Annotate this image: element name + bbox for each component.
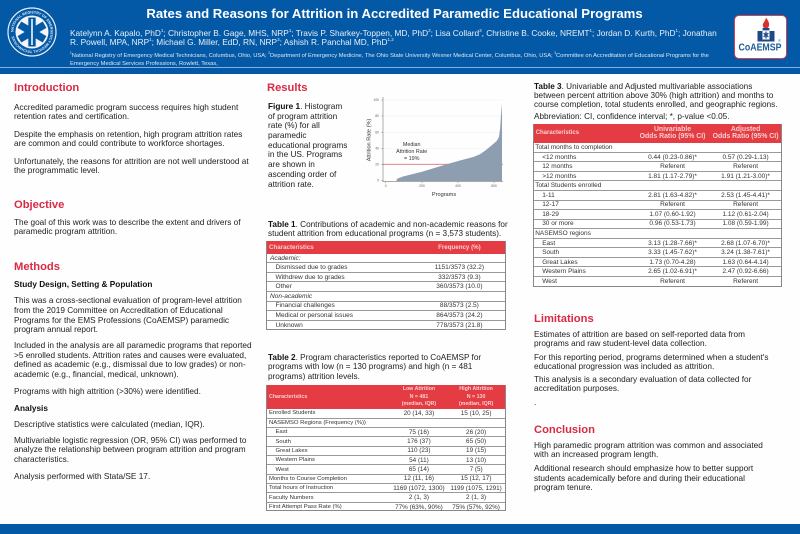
table 2: Great Lakes — [276, 448, 308, 454]
table 2: 7 (5) — [470, 466, 483, 473]
text: limitations paragraph 2: educational progression was included as attrition. — [534, 362, 714, 371]
text: methods paragraph 3: Programs with high attrition (>30%) were identified. — [14, 387, 201, 396]
text: figure 1 caption: paramedic — [268, 131, 307, 140]
affiliations: 1National Registry of Emergency Medical Technicians, Columbus, Ohio, USA; 2Department of Emergency Medicine, The Ohio State University Wexner Medical Center, Columbus, Ohio, USA; 3Committee on Accreditation of Educational Programs for the — [70, 51, 709, 59]
text: analysis paragraph 1: Descriptive statistics were calculated (median, IQR). — [14, 420, 205, 429]
text: limitations paragraph 1 — [534, 330, 745, 348]
table 3: 2.68 (1.07-6.70)* — [721, 240, 770, 247]
text: methods paragraph 2: >5 enrolled students. Attrition rates and causes were evaluated, — [14, 351, 246, 360]
table 3: Referent — [733, 163, 758, 170]
table 1: 1151/3573 (32.2) — [435, 264, 484, 271]
table 2: (median, IQR) — [459, 401, 493, 407]
table 3: South — [542, 249, 559, 256]
table 1 caption: student attrition from educational programs (n = 3,573 students). — [268, 229, 501, 238]
chart: program attrition rate histogram: 100 — [373, 98, 379, 102]
table 2: 75% (57%, 92%) — [452, 504, 500, 511]
text: objective: paramedic program attrition. — [14, 227, 117, 236]
table 3: 2.81 (1.63-4.82)* — [648, 192, 697, 199]
text: figure 1 caption: Figure 1. Histogram — [268, 102, 342, 111]
text: limitations paragraph 3: accreditation purposes. — [534, 384, 619, 393]
table 2: 1169 (1072, 1300) — [393, 485, 445, 492]
table 3: Characteristics — [536, 130, 579, 136]
chart: program attrition rate histogram: 400 — [455, 184, 461, 188]
chart: program attrition rate histogram: 0 — [377, 178, 379, 182]
text: introduction paragraph 1: retention rates and certification. — [14, 112, 129, 121]
table 2: Total hours of Instruction — [269, 485, 333, 491]
text: limitations paragraph 3: This analysis is a secondary evaluation of data collected for — [534, 375, 751, 384]
text: introduction paragraph 1: Accredited paramedic program success requires high student — [14, 103, 238, 112]
affiliations: Emergency Medical Services Professions, Rowlett, Texas, — [70, 61, 218, 67]
table 2: 65 (50) — [466, 438, 486, 445]
table 3: 1.81 (1.17-2.79)* — [648, 173, 697, 180]
table 1 caption: Table 1. Contributions of academic and non-academic reasons for — [268, 220, 508, 229]
text: methods paragraph 1: from the 2019 Committee on Accreditation of Educational — [14, 306, 223, 315]
authors: R. Powell, MPA, NRP1; Michael G. Miller, EdD, RN, NRP3; Ashish R. Panchal MD, PhD1,2 — [70, 37, 394, 47]
table 3: 12-17 — [542, 201, 559, 208]
icon: CoAEMSP logo — [734, 15, 786, 58]
table 2 caption — [268, 353, 481, 381]
table 3 caption: between percent attrition above 30% (high attrition) and months to — [534, 91, 773, 100]
text: stray period: . — [534, 398, 536, 407]
table 2: 12 (11, 16) — [404, 475, 434, 482]
chart: program attrition rate histogram: 40 — [375, 146, 379, 150]
table 1: 88/3573 (2.5) — [440, 302, 479, 309]
table 2: 20 (14, 33) — [404, 410, 434, 417]
table 3: 2.47 (0.92-6.66) — [722, 268, 769, 275]
heading: Objective: Objective — [14, 199, 64, 211]
subheading: analysis: Analysis — [14, 404, 48, 413]
text: methods paragraph 2: defined as academic (e.g., dismissal due to low grades) or non- — [14, 360, 246, 369]
table 3: East — [542, 240, 555, 247]
table 2: Western Plains — [276, 457, 315, 463]
text: conclusion paragraph 2 — [534, 464, 754, 492]
table 2: Months to Course Completion — [269, 476, 347, 482]
table 3: 1.07 (0.60-1.92) — [649, 211, 696, 218]
chart: program attrition rate histogram: Programs — [432, 192, 456, 198]
table 3: 1-11 — [542, 192, 555, 199]
table 3: 30 or more — [542, 220, 574, 227]
table 1: Non-academic — [270, 293, 312, 300]
chart: program attrition rate histogram — [366, 97, 503, 198]
text: conclusion paragraph 2: Additional research should emphasize how to better support — [534, 464, 753, 473]
table 2: 2 (1, 3) — [466, 494, 486, 501]
table 3: Referent — [660, 163, 685, 170]
table 2 caption: programs with low (n = 130 programs) and high (n = 481 — [268, 362, 472, 371]
text: methods paragraph 1 — [14, 296, 242, 334]
table 2: 110 (23) — [407, 447, 431, 454]
table 3 caption: Table 3. Univariable and Adjusted multivariable associations — [534, 82, 752, 91]
text: limitations paragraph 1: programs and raw student-level data collection. — [534, 339, 707, 348]
table 2: South — [276, 438, 291, 444]
table 3: Univariable — [654, 126, 691, 133]
chart: program attrition rate histogram: 80 — [375, 114, 379, 118]
text: introduction paragraph 2: Despite the emphasis on retention, high program attrition rates — [14, 130, 242, 139]
table 3 caption: Abbreviation: CI, confidence interval; *, p-value <0.05. — [534, 112, 729, 121]
table 2: First Attempt Pass Rate (%) — [269, 504, 342, 510]
table 3: 1.12 (0.61-2.04) — [722, 211, 769, 218]
table 2 — [266, 385, 506, 511]
heading: Introduction: Introduction — [14, 82, 79, 94]
table 3: Total Students enrolled — [535, 182, 601, 189]
text: objective — [14, 218, 241, 236]
chart: program attrition rate histogram: Median — [403, 142, 421, 148]
chart: program attrition rate histogram: 20 — [375, 162, 379, 166]
table 1: 778/3573 (21.8) — [436, 322, 483, 329]
subheading: study design: Study Design, Setting & Population — [14, 280, 152, 289]
table 2: 54 (11) — [409, 457, 429, 464]
table 3: 2.65 (1.02-6.91)* — [648, 268, 697, 275]
text: analysis paragraph 2 — [14, 436, 246, 464]
text: methods paragraph 2: academic (e.g., financial, medical, unknown). — [14, 370, 179, 379]
table 3: 3.24 (1.38-7.61)* — [721, 249, 770, 256]
table 1: Other — [276, 283, 292, 290]
table 1 caption — [268, 220, 508, 238]
text: introduction paragraph 3: the programmatic level. — [14, 166, 100, 175]
text: conclusion paragraph 2: program tenure. — [534, 483, 593, 492]
text: methods paragraph 1: Programs for the EMS Professions (CoAEMSP) paramedic — [14, 316, 229, 325]
table 3: 3.33 (1.45-7.62)* — [648, 249, 697, 256]
table 3: 1.63 (0.64-4.14) — [722, 259, 769, 266]
table 1: Medical or personal issues — [276, 312, 353, 319]
heading: Methods: Methods — [14, 261, 60, 273]
table 3 caption: course completion, total students enrolled, and geographic regions. — [534, 100, 778, 109]
table 1: Withdrew due to grades — [276, 274, 345, 281]
text: analysis paragraph 2: Multivariable logistic regression (OR, 95% CI) was performed to — [14, 436, 246, 445]
text: conclusion paragraph 1: with an increased program length. — [534, 450, 658, 459]
text: methods paragraph 1: program annual report. — [14, 325, 98, 334]
text: analysis paragraph 2: analyze the relationship between program attrition and program — [14, 445, 246, 454]
text: methods paragraph 2: Included in the analysis are all paramedic programs that reported — [14, 341, 252, 350]
table 1: Unknown — [276, 322, 303, 329]
table 1: 332/3573 (9.3) — [438, 274, 481, 281]
text: introduction paragraph 2: are common and could contribute to workforce shortages. — [14, 139, 224, 148]
table 1: Academic: — [270, 255, 301, 262]
table 2: Faculty Numbers — [269, 495, 314, 501]
text: limitations paragraph 3 — [534, 375, 752, 393]
table 1: Dismissed due to grades — [276, 264, 348, 271]
table 1: 360/3573 (10.0) — [436, 283, 483, 290]
text: figure 1 caption: rate (%) for all — [268, 121, 320, 130]
text: methods paragraph 2 — [14, 341, 252, 379]
table 2: 15 (10, 25) — [461, 410, 491, 417]
footer band — [0, 524, 800, 534]
chart: program attrition rate histogram: = 19% — [404, 156, 420, 162]
text: figure 1 caption: attrition rate. — [268, 180, 314, 188]
table 3: 0.44 (0.23-0.86)* — [648, 154, 697, 161]
table 3: Odds Ratio (95% CI) — [640, 133, 705, 140]
table 1: 864/3573 (24.2) — [436, 312, 483, 319]
table 3: Great Lakes — [542, 259, 578, 266]
table 2 caption: programs) attrition levels. — [268, 372, 360, 381]
table 3: Adjusted — [731, 126, 760, 133]
table 2: Enrolled Students — [269, 410, 316, 416]
table 3: >12 months — [542, 173, 576, 180]
table 3: West — [542, 278, 557, 285]
chart: program attrition rate histogram: 60 — [375, 130, 379, 134]
table 2: (median, IQR) — [402, 401, 436, 407]
title: Rates and Reasons for Attrition in Accredited Paramedic Educational Programs — [146, 6, 643, 21]
text: conclusion paragraph 1: High paramedic program attrition was common and associated — [534, 441, 763, 450]
table 3: Western Plains — [542, 268, 586, 275]
table 2: 15 (12, 17) — [461, 475, 491, 482]
affiliations — [70, 51, 709, 67]
heading: Results: Results — [267, 82, 307, 94]
table 3: <12 months — [542, 154, 576, 161]
text: limitations paragraph 1: Estimates of attrition are based on self-reported data from — [534, 330, 745, 339]
text: limitations paragraph 2 — [534, 352, 769, 371]
authors — [70, 28, 717, 47]
table 2: 1199 (1075, 1291) — [450, 485, 502, 492]
table 3: Referent — [660, 201, 685, 208]
table 3: Referent — [733, 201, 758, 208]
table 2: 2 (1, 3) — [409, 494, 429, 501]
text: introduction paragraph 3: Unfortunately, the reasons for attrition are not well understood at — [14, 157, 249, 166]
header band — [0, 0, 800, 74]
table 2: 75 (16) — [409, 429, 429, 436]
chart: program attrition rate histogram: 600 — [491, 184, 497, 188]
table 2: NASEMSO Regions (Frequency (%)) — [269, 420, 366, 426]
table 3: 0.57 (0.29-1.13) — [722, 154, 769, 161]
table 3: Referent — [733, 278, 758, 285]
table 3 — [533, 124, 782, 287]
text: conclusion paragraph 1 — [534, 441, 763, 459]
table 3 caption — [534, 82, 778, 121]
text: figure 1 caption: are shown in — [268, 160, 315, 169]
chart: program attrition rate histogram: 0 — [385, 184, 387, 188]
table 2 caption: Table 2. Program characteristics reported to CoAEMSP for — [268, 353, 481, 362]
table 1 — [266, 241, 506, 330]
table 3: Total months to completion — [535, 144, 613, 151]
text: figure 1 caption: of program attrition — [268, 112, 337, 121]
table 2: 65 (14) — [409, 466, 429, 473]
table 2: Characteristics — [269, 394, 307, 400]
heading: Conclusion: Conclusion — [534, 424, 595, 436]
table 3: 3.13 (1.28-7.66)* — [648, 240, 697, 247]
table 3: 1.73 (0.70-4.28) — [649, 259, 696, 266]
text: figure 1 caption: ascending order of — [268, 170, 336, 179]
icon: CoAEMSP logo: ® — [778, 38, 781, 43]
table 2: West — [276, 467, 289, 473]
heading: Limitations: Limitations — [534, 313, 594, 325]
table 2: 77% (63%, 90%) — [395, 504, 443, 511]
text: analysis paragraph 3: Analysis performed with Stata/SE 17. — [14, 472, 150, 481]
table 2: N = 130 — [467, 394, 485, 400]
table 3: NASEMSO regions — [535, 230, 591, 237]
chart: program attrition rate histogram: 200 — [419, 184, 425, 188]
table 1: Frequency (%) — [438, 244, 481, 251]
table 3: Odds Ratio (95% CI) — [713, 133, 778, 140]
text: analysis paragraph 2: characteristics. — [14, 455, 69, 464]
table 1: Financial challenges — [276, 302, 335, 309]
text: introduction paragraph 3 — [14, 157, 249, 175]
table 3: Referent — [660, 278, 685, 285]
table 3: 1.08 (0.59-1.99) — [722, 220, 769, 227]
text: limitations paragraph 2: For this reporting period, programs determined when a student's — [534, 352, 769, 362]
chart: program attrition rate histogram: Attrition Rate — [396, 149, 427, 155]
table 2: N = 481 — [410, 394, 428, 400]
table 1: Characteristics — [269, 244, 314, 251]
header divider — [0, 67, 800, 68]
table 2: 176 (37) — [407, 438, 431, 445]
text: figure 1 caption: educational programs — [268, 141, 347, 150]
table 2: High Attrition — [459, 386, 493, 392]
text: figure 1 caption — [268, 102, 348, 188]
table 2: East — [276, 429, 287, 435]
table 3: 0.96 (0.53-1.73) — [649, 220, 696, 227]
table 2: 26 (20) — [466, 429, 486, 436]
table 3: 2.53 (1.45-4.41)* — [721, 192, 770, 199]
chart: program attrition rate histogram: Attrition Rate (%) — [366, 119, 372, 161]
text: introduction paragraph 1 — [14, 103, 238, 121]
text: figure 1 caption: in the US. Programs — [268, 150, 342, 159]
table 2: Low Attrition — [403, 386, 435, 392]
text: conclusion paragraph 2: students academically before and during their educational — [534, 474, 745, 483]
table 2: 13 (10) — [466, 457, 486, 464]
text: introduction paragraph 2 — [14, 130, 242, 148]
table 3: 12 months — [542, 163, 573, 170]
authors: Katelynn A. Kapalo, PhD1; Christopher B. Gage, MHS, NRP1; Travis P. Sharkey-Toppen, MD, PhD2; Lisa Collard3, Christine B. Cooke, NREMT1; Jordan D. Kurth, PhD1; Jonathan — [70, 28, 717, 38]
table 3: 18-29 — [542, 211, 559, 218]
text: objective: The goal of this work was to describe the extent and drivers of — [14, 218, 241, 227]
table 3: 1.91 (1.21-3.00)* — [721, 173, 770, 180]
icon: NREMT seal: NATIONAL REGISTRY OF EMERGENCY MEDICAL TECHNICIANS — [10, 10, 54, 54]
text: methods paragraph 1: This was a cross-sectional evaluation of program-level attrition — [14, 296, 242, 305]
table 2: 19 (15) — [466, 447, 486, 454]
